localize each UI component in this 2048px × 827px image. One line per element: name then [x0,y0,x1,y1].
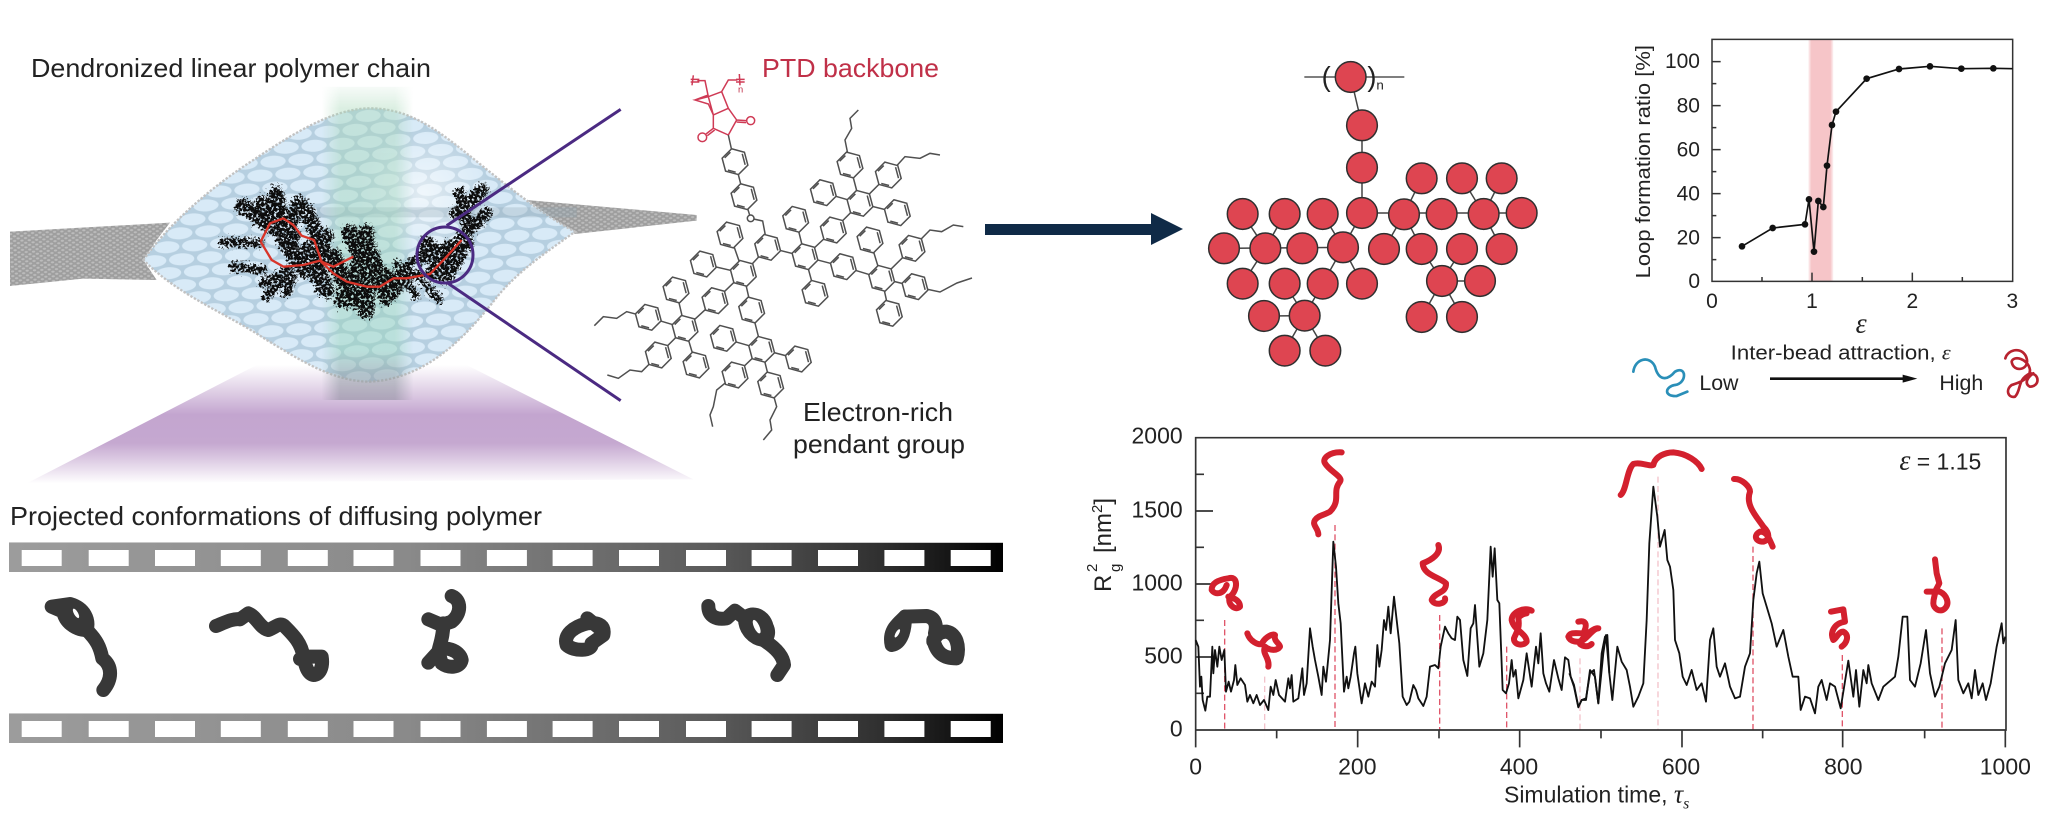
y axis title: Loop formation ratio [%] [1632,45,1655,278]
label: electron-rich pendant group: pendant group [793,429,965,459]
y axis labels: 80 [1677,95,1700,118]
title: dendronized linear polymer chain: Dendronized linear polymer chain [31,53,431,83]
benzene rings [634,146,930,401]
back sheet seen through membrane [317,207,577,217]
arrow low to high [1770,375,1917,383]
beads [1209,62,1537,366]
purple light cone [27,365,693,483]
x axis labels: 1000 [1980,753,2031,779]
label: electron-rich pendant group: Electron-rich [803,397,953,427]
y axis labels: 0 [1170,715,1183,741]
y axis labels: 500 [1144,643,1183,669]
x axis labels: 0 [1706,290,1718,313]
dashed marker lines [1225,477,1942,730]
conformation 1 [52,604,110,690]
icon: open blue coil [1633,360,1687,396]
label high: High [1939,371,1983,395]
attraction caption: Inter-bead attraction, ε [1731,341,1952,364]
brackets and repeat index: ( [1322,61,1331,92]
x axis labels [1189,753,2031,779]
small n: n [738,85,743,95]
y axis labels [1132,423,1183,741]
red PTD unit [691,74,755,142]
y axis labels: 1000 [1132,570,1183,596]
chart: Rg squared over simulation time [1084,423,2031,813]
bead bonds [1224,77,1522,351]
annotation: epsilon value: ε = 1.15 [1899,445,1981,476]
backbone line [1304,75,1404,79]
x axis labels: 600 [1662,753,1700,779]
y axis labels: 100 [1665,50,1700,73]
icon: looped red coil [2005,350,2037,397]
conformation 5 [708,606,784,675]
molecular structure: pendant group [594,74,972,440]
axes and ticks [1712,39,2013,281]
red polymer backbone [261,218,462,287]
y axis title: g [1107,564,1124,572]
x axis symbol: ε [1856,309,1867,340]
ether oxygen [747,215,754,222]
x axis labels: 400 [1500,753,1538,779]
red conformation snapshots [1212,452,1947,667]
film strip: top [9,542,1003,572]
brackets and repeat index: ) [1367,61,1376,92]
time series right part [1569,487,2005,713]
green light beam [322,87,413,400]
bonds and butyl chains [594,110,972,440]
x axis title: Simulation time, τ [1504,780,1683,809]
data line [1742,66,2013,252]
film strip: bottom [9,713,1003,743]
y axis labels: 1500 [1132,497,1183,523]
brackets and repeat index: n [1376,77,1384,92]
y axis title: ] [1090,498,1117,505]
zoom lens with lines [417,109,621,401]
brackets and repeat index [1322,61,1384,92]
membrane highlight [357,127,490,260]
time series left part [1196,542,1609,711]
right graphene sheet [527,200,697,234]
y axis title [1084,498,1124,592]
y axis labels [1665,50,1700,293]
x axis labels: 200 [1338,753,1377,779]
y axis labels: 40 [1677,183,1700,206]
highlighted band [1808,40,1833,281]
x axis labels: 1 [1806,290,1818,313]
left graphene sheet [10,223,170,286]
y axis title: 2 [1089,505,1106,513]
chart: loop formation ratio [1632,39,2037,397]
x axis labels [1706,290,2018,313]
projected polymer conformations [52,596,958,690]
data markers [1739,63,1997,255]
label: PTD backbone: PTD backbone [762,53,939,83]
x axis labels: 800 [1824,753,1863,779]
label low: Low [1699,371,1739,395]
y axis title: 2 [1084,564,1101,572]
y axis labels: 60 [1677,139,1700,162]
diagram: coarse-grained bead model [1209,61,1537,366]
conformation 3 [428,596,462,667]
axes and ticks [1196,438,2006,747]
label: electron-rich pendant group [793,397,965,459]
dendritic side groups [223,190,487,310]
conformation 6 [891,616,958,658]
y axis title: R [1090,575,1117,592]
curved membrane [143,108,575,382]
y axis labels: 0 [1688,270,1700,293]
y axis title: [nm [1090,513,1117,553]
conformation 4 [566,618,604,650]
y axis labels: 2000 [1132,423,1183,449]
x axis title: s [1683,796,1689,813]
y axis labels: 20 [1677,227,1700,250]
x axis labels: 0 [1189,753,1202,779]
x axis labels: 2 [1906,290,1918,313]
conformation 2 [216,613,322,675]
heading: projected conformations: Projected conformations of diffusing polymer [10,501,542,531]
x axis labels: 3 [2006,290,2018,313]
arrow: to coarse-grained model [985,213,1183,245]
illustration: graphene membrane with dendronized polymer [10,87,697,483]
